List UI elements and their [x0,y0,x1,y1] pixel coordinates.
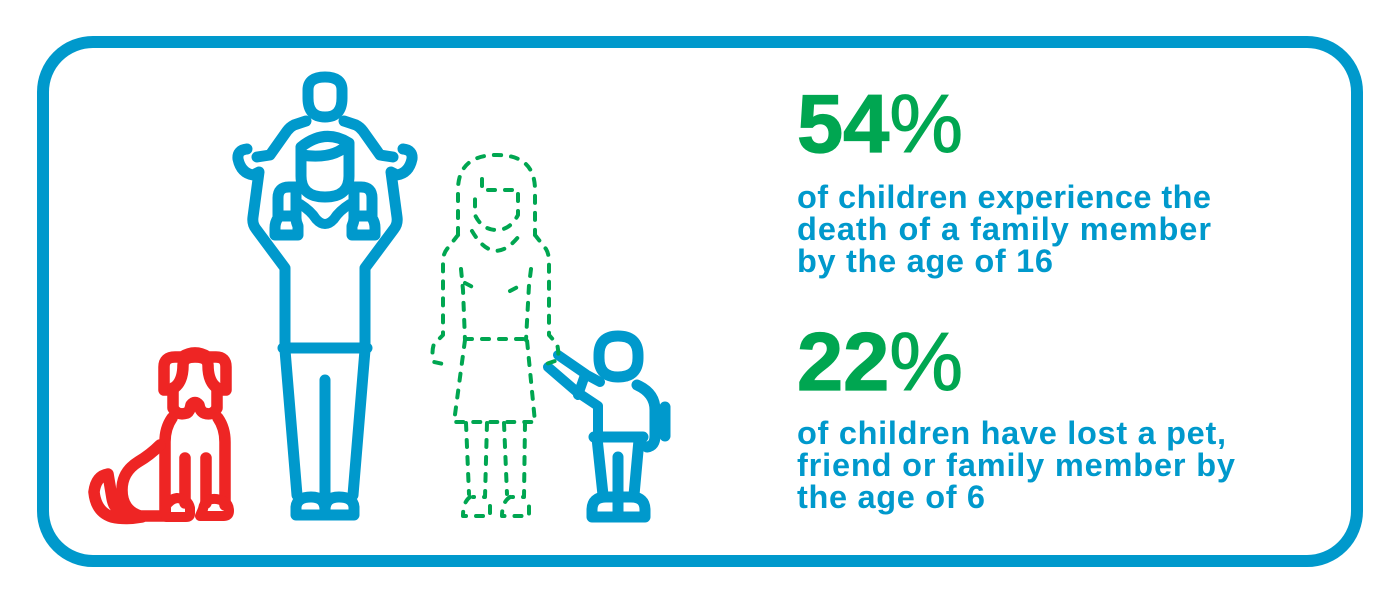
small child: raised arm [548,355,600,437]
icon: father carrying child on shoulders [238,77,412,515]
icon: small child with backpack [548,336,665,517]
text block: 54% description: death of a family member [797,211,1211,247]
text block: 54% description: by the age of 16 [797,243,1053,279]
dog body and legs [165,418,225,510]
small child: torso and other arm [594,385,655,447]
child on shoulders: arms [257,121,393,157]
father: waist and legs [283,348,367,515]
mother: face [475,179,518,230]
father: chest collar [300,204,350,224]
mother: hair [458,155,535,235]
father: arms and torso [238,149,412,348]
icon: red dog [94,353,229,518]
text block: 22% description: of children have lost a pet, [797,415,1226,451]
statistic: 22%: 22% [797,315,963,408]
text block: 22% description: friend or family member by [797,447,1235,483]
mother: skirt [454,340,535,422]
small child: head [599,336,638,377]
small child: backpack [660,407,670,436]
mother: legs [466,423,525,497]
mother: shoulders and arms [432,235,558,365]
icon: dashed green mother outline [432,155,558,516]
text block: 22% description [797,415,1235,515]
mother: shoes [463,497,529,516]
mother: bodice [461,269,531,340]
text block: 54% description [797,179,1211,279]
dog paws [166,498,229,517]
dog head and ears [164,353,226,390]
father: shoes [296,497,354,515]
child on shoulders: legs [275,187,375,235]
small child: shoes [592,497,645,517]
small child: legs [597,438,639,517]
statistic: 54%: 54% [797,77,963,170]
child on shoulders: head [308,77,342,117]
dog back and tail [94,445,165,518]
text block: 22% description: the age of 6 [797,479,985,515]
mother: neckline [472,231,522,251]
text block: 54% description: of children experience the [797,179,1211,215]
father: head [301,136,349,197]
dog muzzle [173,388,217,414]
